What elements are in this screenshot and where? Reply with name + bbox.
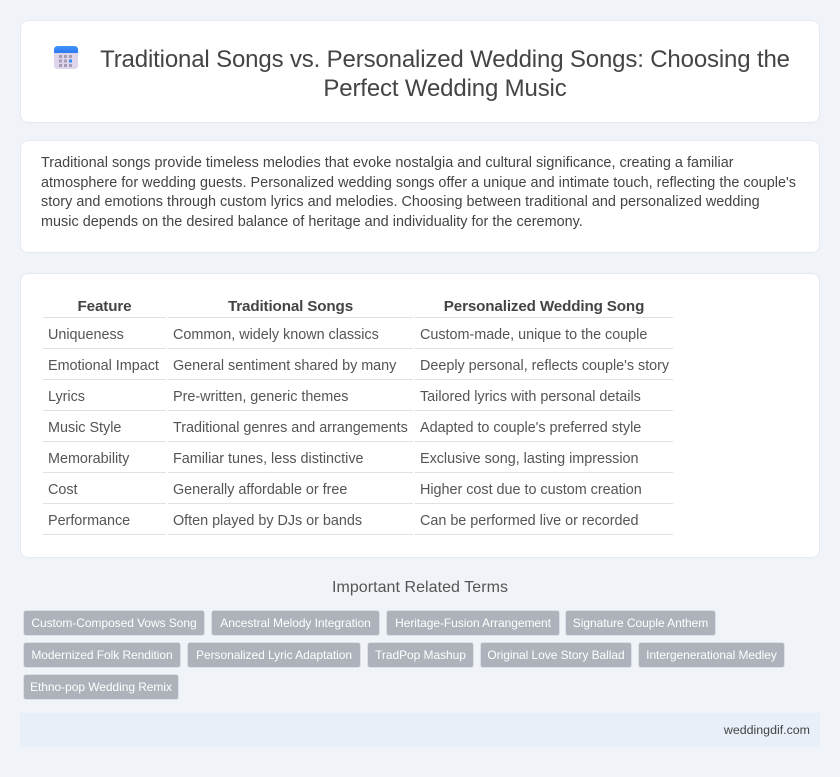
table header row: Personalized Wedding Song [444, 298, 644, 315]
row: Memorability: Exclusive song, lasting impression [420, 451, 638, 467]
row: Emotional Impact: Emotional Impact [48, 358, 159, 374]
text block: introduction paragraph: Traditional songs provide timeless melodies that evoke nostalgia and cultural significance, creating a familiar [41, 155, 734, 171]
tag: Original Love Story Ballad [487, 648, 625, 662]
title: Traditional Songs vs. Personalized Wedding Songs: Choosing the [100, 46, 790, 73]
row: Emotional Impact [48, 358, 669, 374]
row: Memorability: Memorability [48, 451, 129, 467]
panel: title card [20, 20, 820, 123]
row: Uniqueness: Uniqueness [48, 327, 124, 343]
table header row: Traditional Songs [228, 298, 353, 315]
table header row [43, 298, 673, 318]
row: Emotional Impact: Deeply personal, reflects couple's story [420, 358, 669, 374]
row: Emotional Impact: General sentiment shared by many [173, 358, 396, 374]
tag list: related terms [23, 610, 785, 700]
table: comparison [43, 298, 673, 318]
panel: comparison table [20, 273, 820, 558]
text block: introduction paragraph: story and emotions through custom lyrics and melodies. Choosing between traditional and personalized wedding [41, 194, 760, 210]
title: Perfect Wedding Music [323, 75, 567, 102]
row: Performance [48, 513, 639, 529]
heading: related terms: Important Related Terms [332, 579, 508, 596]
row: Cost [48, 482, 642, 498]
tag [480, 642, 632, 668]
row: Lyrics [48, 389, 641, 405]
tag [23, 642, 181, 668]
row: Performance: Can be performed live or recorded [420, 513, 639, 529]
tag [638, 642, 785, 668]
row: Lyrics: Tailored lyrics with personal details [420, 389, 641, 405]
table header row: Feature [78, 298, 131, 315]
footer source text: weddingdif.com [724, 723, 810, 737]
tag [187, 642, 361, 668]
tag: Intergenerational Medley [646, 648, 777, 662]
row: Uniqueness: Common, widely known classics [173, 327, 379, 343]
tag [211, 610, 380, 636]
icon: calendar [54, 46, 78, 69]
text block: introduction paragraph: atmosphere for wedding guests. Personalized wedding songs offer a unique and intimate touch, reflecting the couple's [41, 175, 796, 191]
row: Music Style: Traditional genres and arrangements [173, 420, 408, 436]
tag: Ethno-pop Wedding Remix [30, 680, 172, 694]
row: Music Style: Adapted to couple's preferred style [420, 420, 641, 436]
tag: TradPop Mashup [375, 648, 466, 662]
tag [23, 674, 179, 700]
row: Music Style [48, 420, 641, 436]
tag: Ancestral Melody Integration [220, 616, 371, 630]
panel: introduction [20, 140, 820, 253]
row: Uniqueness [48, 327, 647, 343]
row: Cost: Higher cost due to custom creation [420, 482, 642, 498]
tag: Personalized Lyric Adaptation [196, 648, 352, 662]
row: Performance: Often played by DJs or bands [173, 513, 362, 529]
row: Cost: Generally affordable or free [173, 482, 347, 498]
text block: introduction paragraph [41, 155, 796, 230]
title [100, 46, 790, 102]
tag: Custom-Composed Vows Song [31, 616, 197, 630]
tag: Heritage-Fusion Arrangement [395, 616, 551, 630]
row: Performance: Performance [48, 513, 130, 529]
tag: Modernized Folk Rendition [31, 648, 173, 662]
row: Memorability: Familiar tunes, less distinctive [173, 451, 364, 467]
tag [367, 642, 474, 668]
row: Cost: Cost [48, 482, 78, 498]
tag [565, 610, 716, 636]
tag [23, 610, 205, 636]
row: Lyrics: Lyrics [48, 389, 85, 405]
text block: introduction paragraph: music depends on the desired balance of heritage and individuality for the ceremony. [41, 214, 583, 230]
tag: Signature Couple Anthem [573, 616, 708, 630]
row: Lyrics: Pre-written, generic themes [173, 389, 348, 405]
row: Uniqueness: Custom-made, unique to the couple [420, 327, 647, 343]
tag [386, 610, 560, 636]
footer bar [20, 713, 820, 747]
row: Memorability [48, 451, 638, 467]
row: Music Style: Music Style [48, 420, 121, 436]
